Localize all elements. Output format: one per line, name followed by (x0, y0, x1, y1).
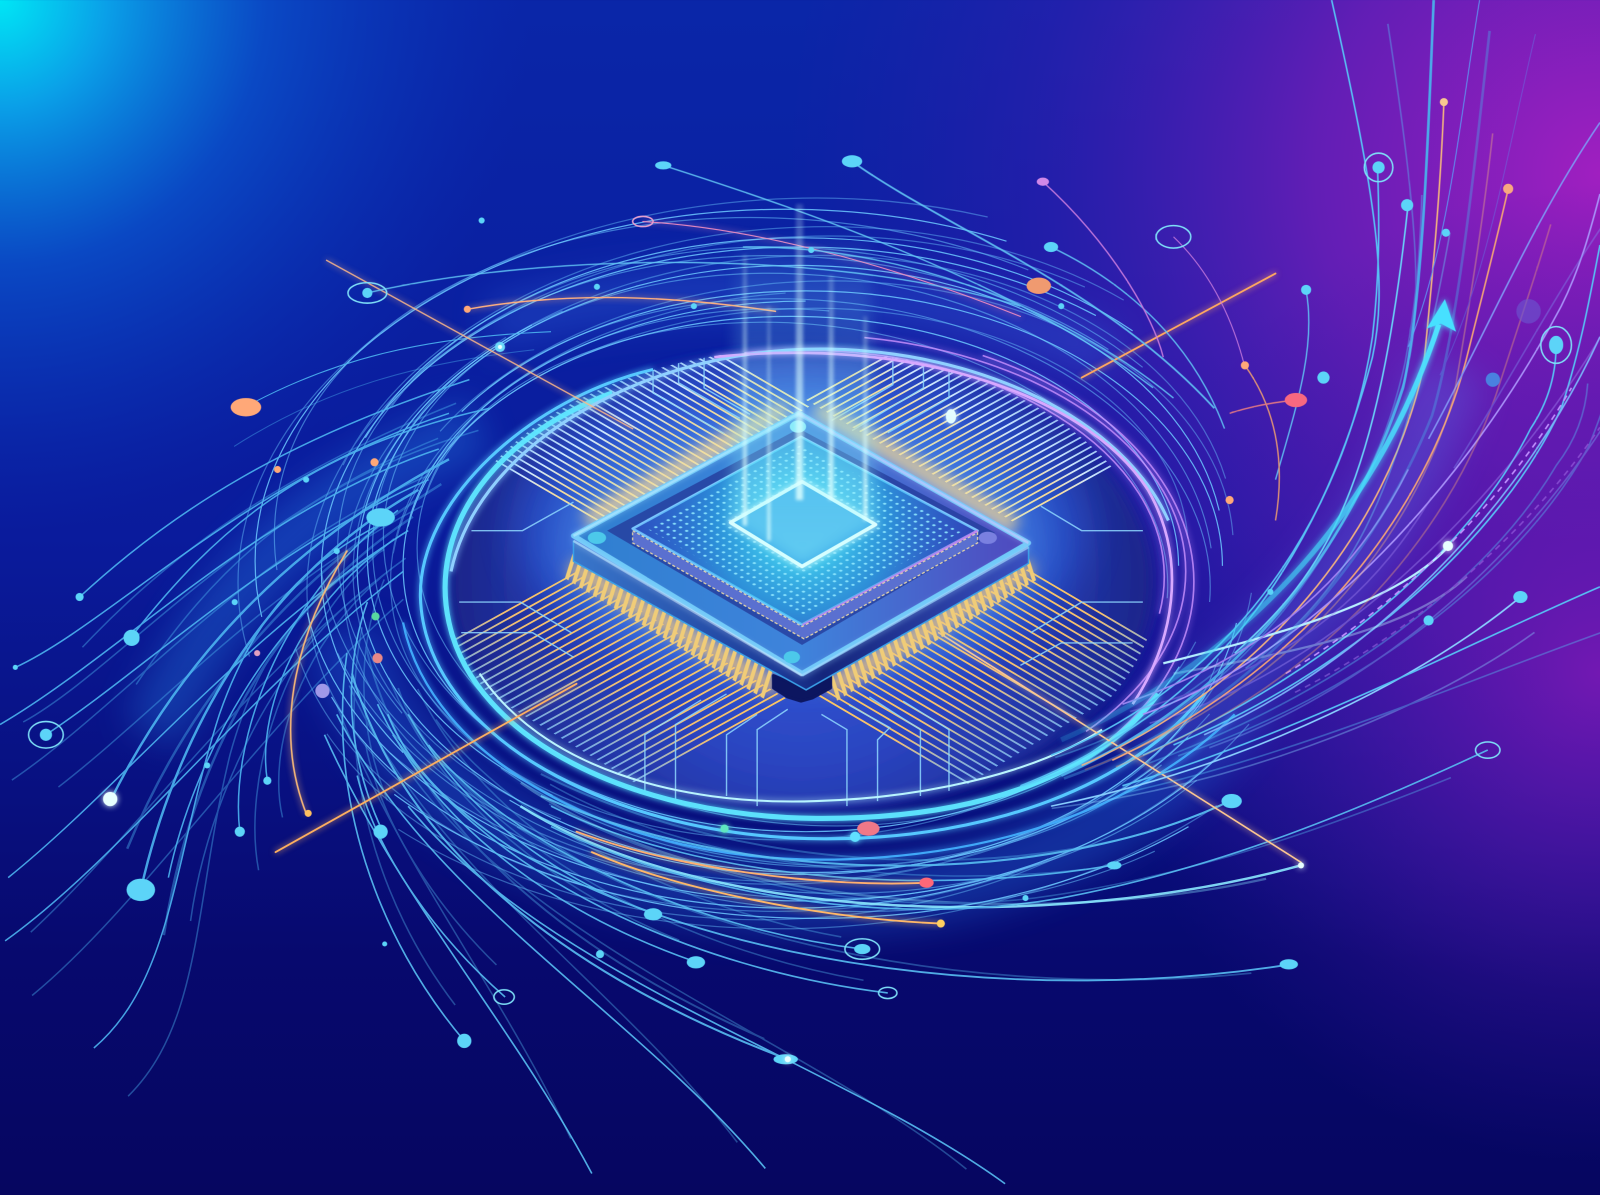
traces: upper right (882, 358, 1089, 480)
light beams (731, 204, 876, 566)
data streams: top arcs (367, 161, 1309, 520)
halo behind chip (556, 408, 1046, 674)
thin outer rings (250, 174, 1383, 918)
bright main ring (403, 349, 1235, 860)
data streams: left tails (0, 332, 551, 1048)
lower tail copies (314, 577, 1458, 1193)
thin ring copies offset (206, 121, 1423, 967)
core glow (633, 437, 978, 625)
thin ring copies (240, 141, 1398, 956)
gold pins: lower right (833, 564, 1035, 687)
package side (573, 541, 1029, 690)
soft swirl glow (153, 291, 1449, 898)
hollow ring nodes (29, 153, 1571, 1004)
package top face (573, 413, 1029, 674)
dot grid (647, 445, 963, 616)
mounting holes (588, 420, 997, 663)
package groove (607, 429, 995, 645)
package glow edges (573, 413, 1029, 676)
traces: upper left (525, 363, 735, 479)
inner substrate side (633, 531, 978, 639)
purple right arcs (408, 327, 1194, 837)
orange accent lines (276, 221, 1301, 924)
traces: lower left (501, 613, 710, 740)
node dots and rings (13, 98, 1571, 1064)
microchip (556, 204, 1046, 701)
circuit traces radiating from chip (459, 347, 1143, 806)
right sweep copies (1021, 2, 1600, 847)
gold glow along chip edges (571, 408, 1031, 689)
arrow: rising data stream (1061, 299, 1456, 740)
filled cyan nodes (13, 155, 1563, 1064)
orange and pink nodes (231, 98, 1513, 928)
traces: lower right (893, 613, 1103, 740)
data streams: sweeping lower tails (324, 602, 1488, 1184)
stepped traces: top and bottom (459, 347, 1143, 806)
central die (731, 482, 876, 566)
left tail copies (0, 350, 584, 1103)
white bright nodes (103, 345, 1453, 1062)
inner substrate (633, 437, 978, 625)
inner edge purple (802, 531, 978, 625)
spiral data rings (206, 121, 1423, 967)
package underside (773, 676, 831, 701)
data streams: right sweep bundle (1020, 0, 1600, 806)
gold pins: lower left (569, 565, 772, 687)
circuit board disc (449, 353, 1153, 810)
